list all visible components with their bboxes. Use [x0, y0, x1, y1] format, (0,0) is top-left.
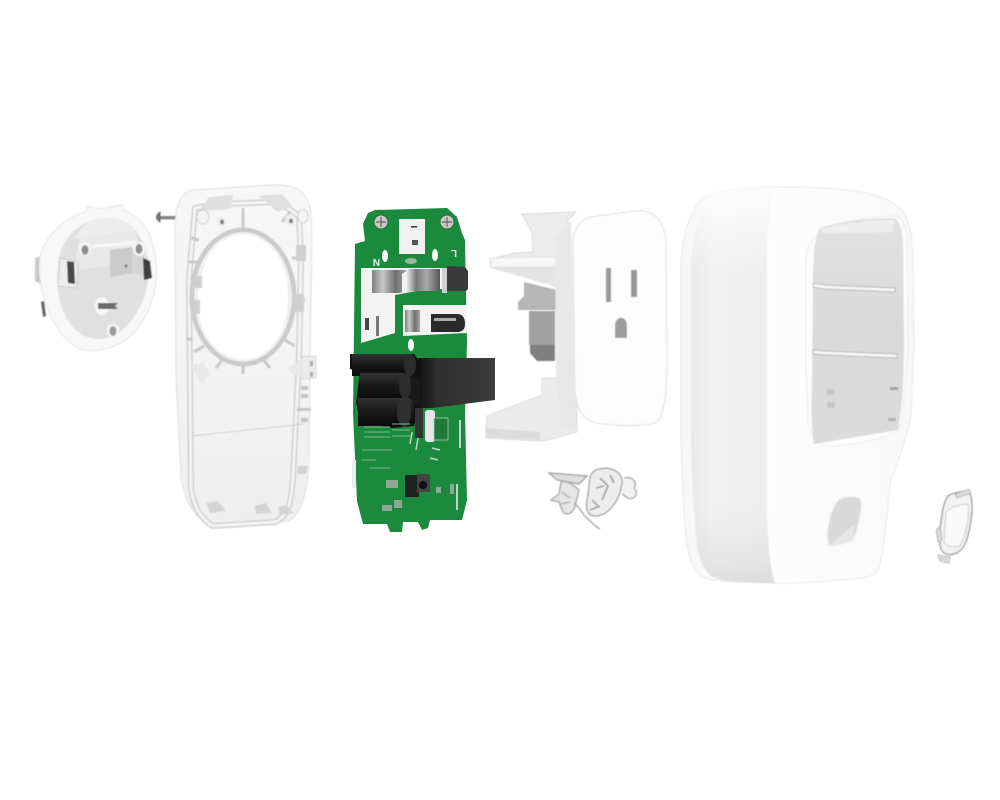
- board labels: N: [373, 256, 380, 267]
- housing side shading: [691, 187, 775, 583]
- top contact pad: [399, 219, 425, 254]
- housing small window: [828, 497, 861, 546]
- clear lens: [936, 489, 972, 563]
- white metal contact area: [361, 268, 469, 343]
- outlet slots: [606, 268, 611, 302]
- lower components: [415, 408, 423, 438]
- round socket base: [35, 205, 157, 351]
- green circuit board: L: [451, 247, 457, 258]
- main white housing: [681, 187, 914, 583]
- base clips and contacts: [58, 258, 78, 288]
- socket frame bottom: [486, 370, 577, 441]
- clear light guide part: [549, 468, 636, 529]
- relay block: [418, 358, 495, 408]
- metal contact strips: [372, 270, 408, 293]
- screw: [156, 212, 178, 222]
- green circuit board: [350, 208, 495, 532]
- inductor area: [403, 305, 467, 336]
- housing opening interior: [812, 218, 904, 444]
- plate inner frame: [189, 202, 301, 526]
- socket frame grey interior: [518, 282, 557, 310]
- capacitors: [350, 354, 420, 428]
- socket frame top: [490, 212, 576, 268]
- housing interior shelves: [813, 283, 895, 292]
- socket face plate: [573, 211, 667, 426]
- base inner cavity: [57, 218, 149, 339]
- back plate with oval opening: [175, 185, 316, 526]
- plate side tab: [302, 356, 316, 379]
- housing rim: [806, 216, 908, 446]
- socket module: [486, 211, 667, 441]
- mounting screws: [374, 215, 388, 229]
